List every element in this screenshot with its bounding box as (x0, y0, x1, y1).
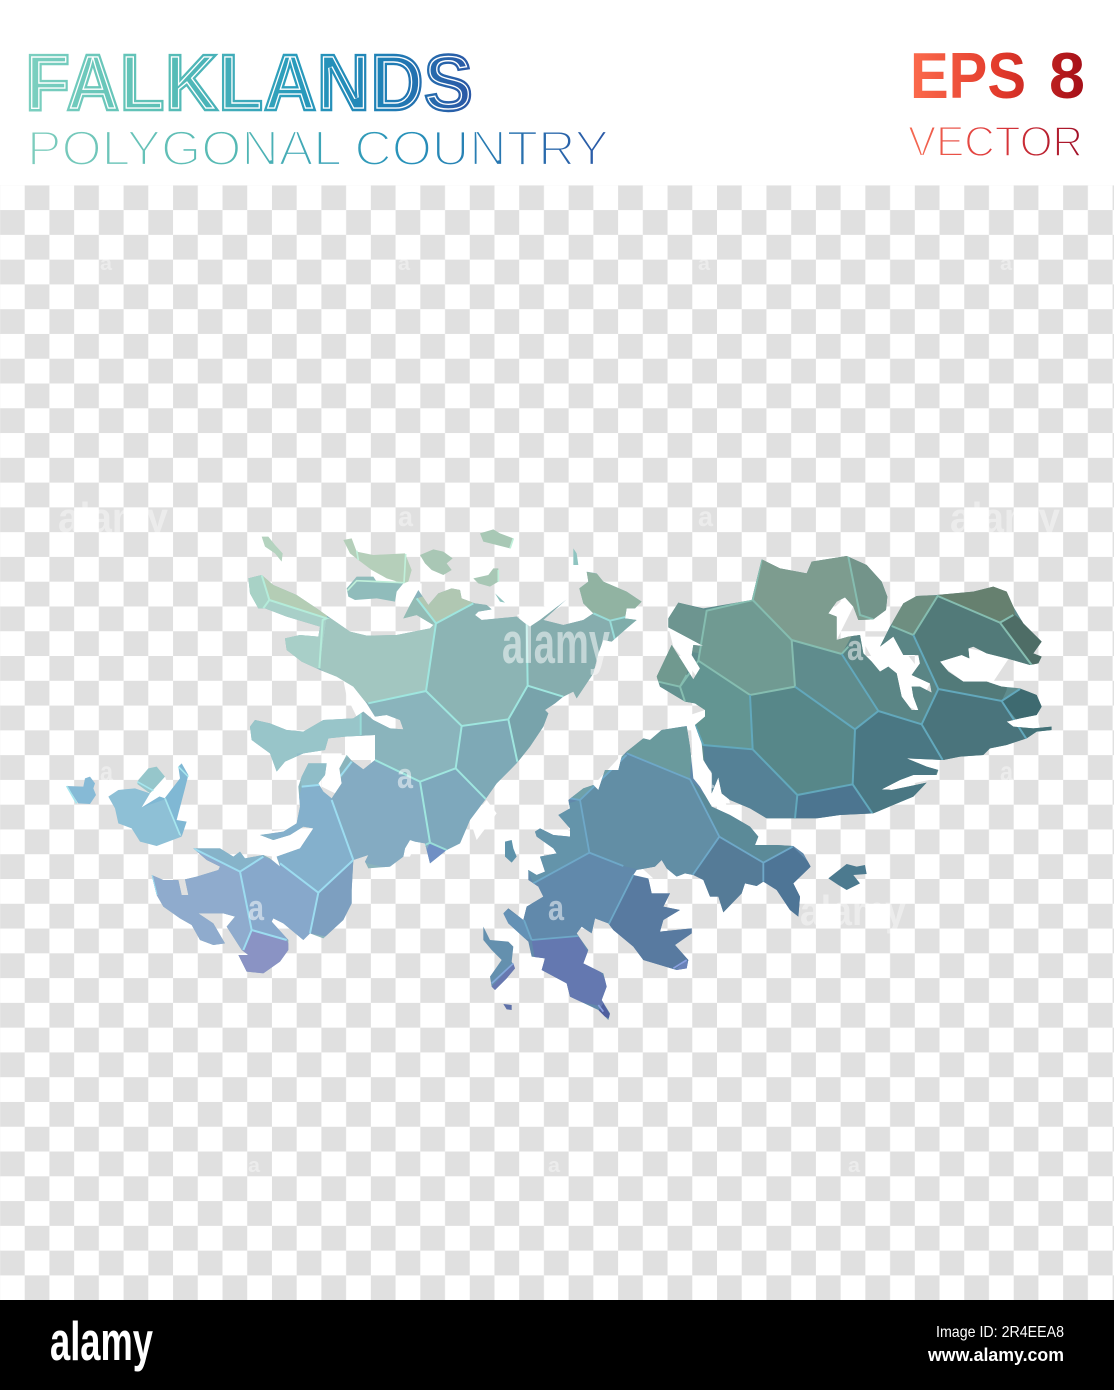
small watermark letters over map: a (248, 887, 265, 928)
faint watermarks on checkerboard: a (1000, 756, 1013, 787)
West Falkland land with polygon cells (152, 529, 642, 974)
small watermark letters over map: a (548, 887, 565, 928)
faint watermarks on checkerboard: a (1000, 253, 1013, 275)
small watermark letters over map: a (397, 755, 414, 796)
East Falkland land with polygon cells (656, 556, 1052, 818)
footer logo: alamy (50, 1310, 153, 1372)
faint watermarks on checkerboard: alamy (950, 494, 1061, 541)
title: FALKLANDS: FALKLANDS (25, 38, 473, 127)
north islets (262, 529, 578, 603)
small watermark letters over map: a (847, 627, 864, 668)
small watermark letters over map (248, 627, 864, 928)
faint watermarks on checkerboard: a (548, 1155, 561, 1177)
faint watermarks on checkerboard: a (848, 1155, 861, 1177)
footer website: www.alamy.com (927, 1345, 1064, 1365)
southwest islet (483, 927, 515, 1010)
faint watermarks on checkerboard: alamy (800, 887, 907, 934)
watermark over map: alamy (502, 611, 610, 676)
title: FALKLANDS: FALKLANDS (25, 38, 473, 127)
Lafonia land with polygon cells (470, 720, 867, 1030)
small watermark letters over map: a (698, 755, 715, 796)
footer bar (0, 1300, 1114, 1390)
halo: white patches around coastlines, west (250, 563, 612, 857)
faint watermarks on checkerboard: a (698, 501, 713, 532)
subtitle: POLYGONAL COUNTRY: POLYGONAL COUNTRY (27, 122, 609, 176)
faint watermarks on checkerboard: a (100, 253, 113, 275)
badge: EPS 8: EPS (910, 39, 1026, 112)
eastern islet (828, 864, 867, 890)
small island near Lafonia (505, 840, 517, 863)
halo: white patches around coastlines, east (668, 597, 1040, 803)
footer image id: Image ID: 2R4EEA8 (936, 1324, 1064, 1341)
faint watermarks on checkerboard: a (698, 253, 711, 275)
faint watermarks on checkerboard: a (398, 253, 411, 275)
faint watermarks on checkerboard: a (398, 501, 413, 532)
faint watermarks on checkerboard (58, 253, 1061, 1177)
badge: EPS 8: 8 (1049, 39, 1085, 112)
far west islands (67, 763, 188, 846)
faint watermarks on checkerboard: a (248, 1155, 261, 1177)
faint watermarks on checkerboard: a (100, 756, 113, 787)
map: Falkland Islands low-poly (67, 529, 1073, 1030)
halo: white patches around coastlines, south (518, 730, 727, 920)
faint watermarks on checkerboard: alamy (58, 494, 169, 541)
badge: VECTOR: VECTOR (908, 118, 1083, 166)
